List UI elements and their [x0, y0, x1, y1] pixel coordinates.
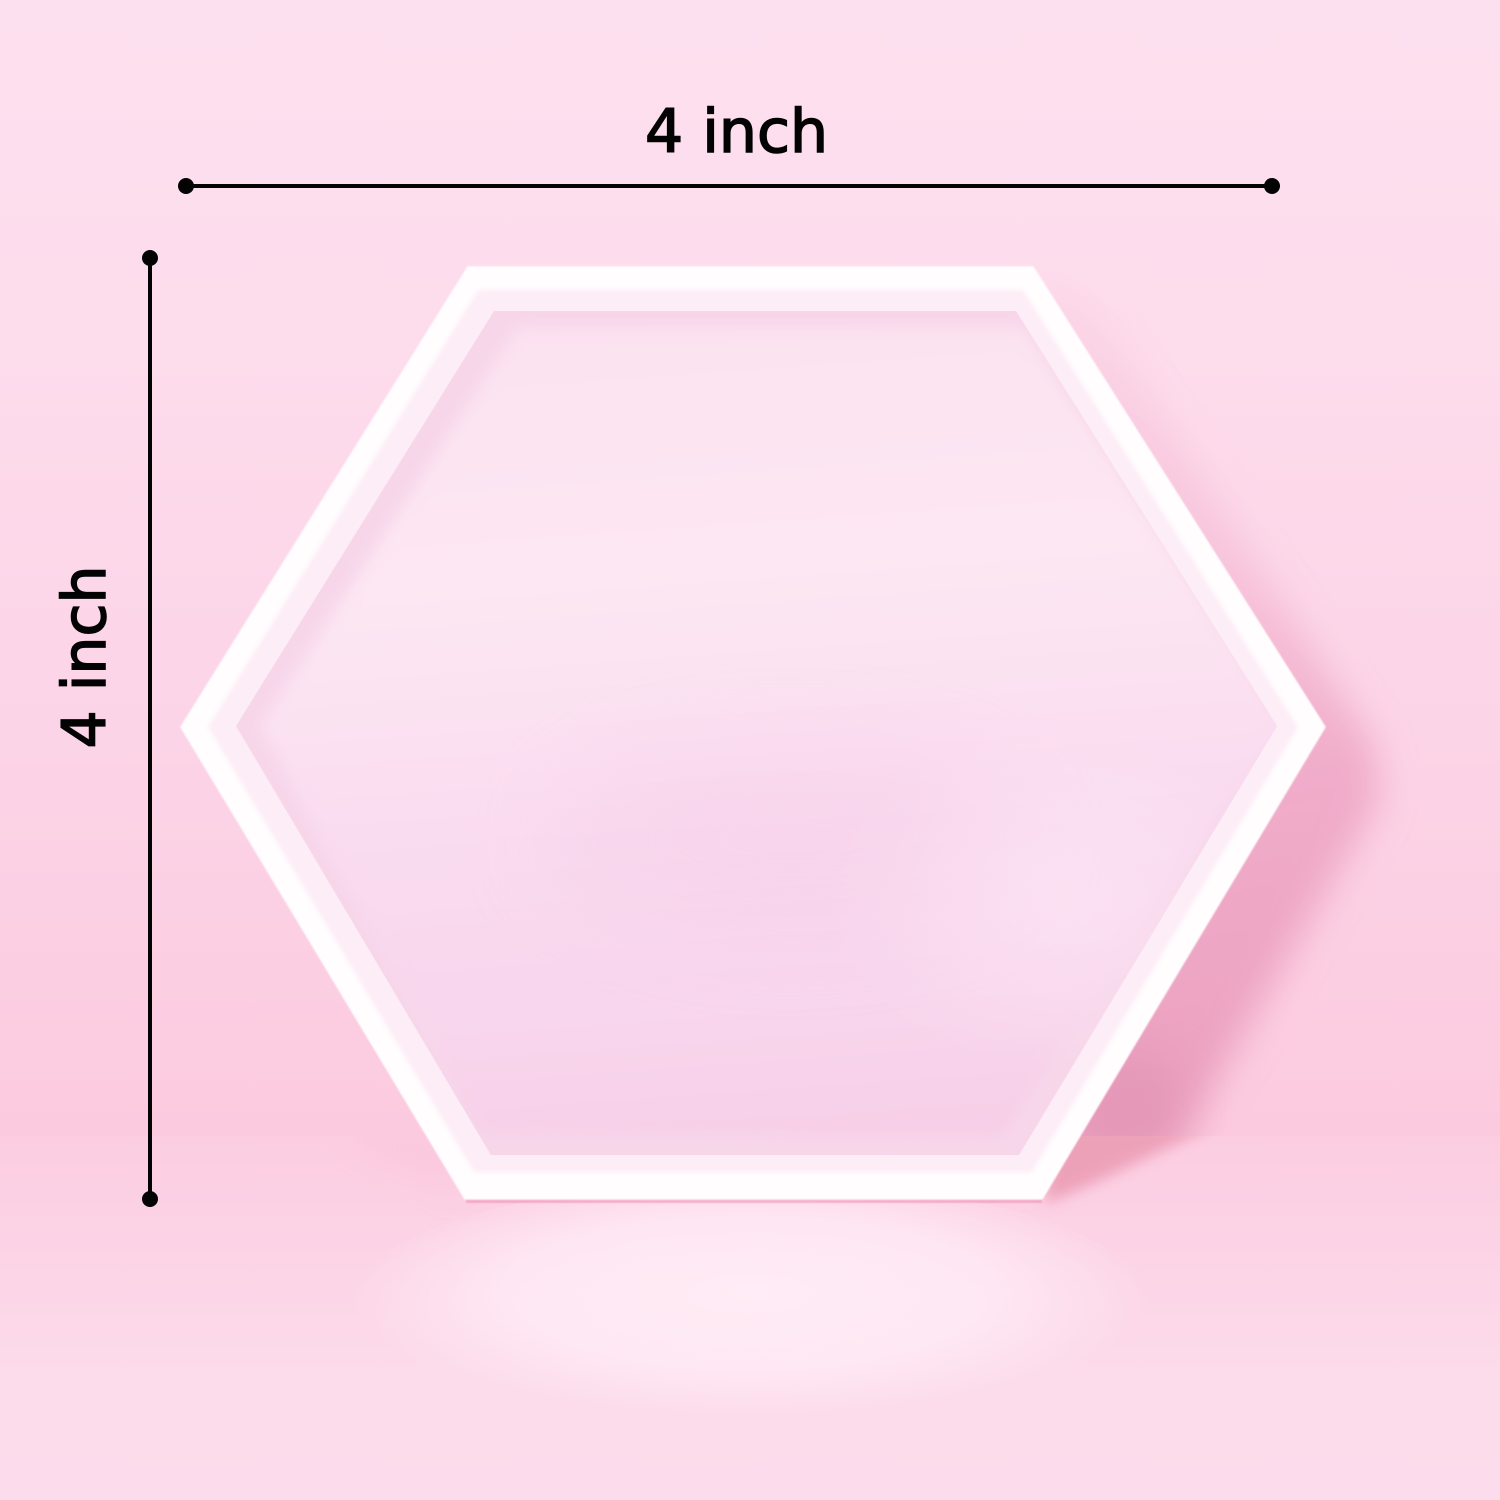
floor reflection: [350, 1180, 1150, 1430]
tray outer rim: [181, 267, 1325, 1199]
tray inner face: [230, 305, 1290, 1165]
face centre panel: [267, 330, 1268, 794]
hexagon tray: [181, 267, 1325, 1199]
face recessed band: [230, 305, 1290, 1165]
height dimension: [50, 250, 158, 1207]
background wall: [0, 0, 1500, 1136]
height top endpoint: [142, 250, 158, 266]
width line: [186, 184, 1272, 188]
height bottom endpoint: [142, 1191, 158, 1207]
height line: [148, 258, 152, 1199]
width label: 4 inch: [645, 97, 828, 167]
face lower right glow: [1016, 881, 1098, 936]
floor shadow: [330, 1125, 1215, 1204]
background floor: [0, 1136, 1500, 1500]
width right endpoint: [1264, 178, 1280, 194]
height label: 4 inch: [50, 566, 120, 748]
wall shadow behind tray: [1079, 334, 1392, 1136]
tray inner bevel: [208, 290, 1298, 1172]
width dimension: [178, 97, 1280, 194]
width left endpoint: [178, 178, 194, 194]
face soft shading: [550, 750, 1030, 930]
